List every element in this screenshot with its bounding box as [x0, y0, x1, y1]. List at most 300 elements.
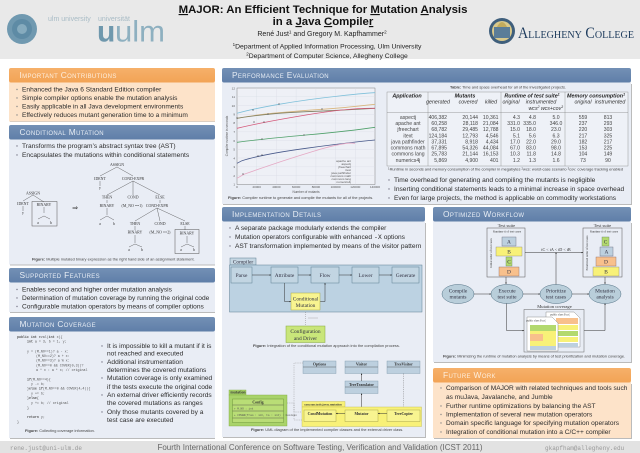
logo: ulm university: universität	[98, 16, 130, 23]
panel: optimized workflow	[433, 207, 632, 363]
figure: AST transformation: BINARY	[100, 204, 115, 208]
bullet list: conditional mutation	[16, 143, 190, 159]
bullet list: conditional mutation: Encapsulates the mutations within conditional statements	[22, 152, 190, 159]
bullet list: coverage: test case are executed	[107, 417, 174, 424]
diagram: workflow: tC < tA < tD < tB	[541, 247, 571, 252]
bullet list: coverage	[101, 343, 213, 424]
table rows	[390, 115, 612, 164]
diagram: compiler pipeline: Conditional	[293, 296, 319, 302]
table: time and space overhead: wcs	[528, 106, 538, 112]
table rows: 1.3	[529, 158, 536, 164]
chart: compiler runtime: java pathfinder	[330, 171, 351, 175]
logo: ulm university: u	[97, 16, 115, 48]
table: time and space overhead: Application	[391, 94, 422, 100]
chart: compiler runtime: itext	[345, 168, 351, 172]
figure: AST transformation: THEN	[102, 196, 112, 200]
table rows: 217	[579, 134, 587, 140]
bullet list: coverage: It is impossible to kill a mutant if it is	[107, 343, 212, 350]
figure: AST transformation: a	[180, 248, 182, 252]
table rows: 12,788	[483, 127, 499, 133]
code listing: y = (M_NO==1)? a - x:	[27, 350, 69, 354]
diagram: workflow: mutants	[449, 294, 467, 300]
chart: compiler runtime: 10	[232, 104, 235, 108]
table: time and space overhead: wcs+cov	[541, 106, 561, 112]
table rows: 346.0	[550, 121, 563, 127]
diagram: workflow: Initial order of test cases	[489, 237, 493, 268]
table: time and space overhead: instrumented	[595, 100, 626, 106]
table rows: 1.2	[513, 158, 520, 164]
figure caption: coverage: Figure: Collecting coverage information.	[25, 428, 95, 433]
table rows: 23.0	[551, 127, 561, 133]
table rows: 73	[580, 158, 586, 164]
table rows: 37,331	[431, 140, 447, 146]
code listing: }	[17, 420, 19, 424]
figure: AST transformation: y	[22, 211, 24, 215]
diagram: UML classes: CondMutation	[308, 412, 333, 416]
diagram: workflow: B	[507, 250, 511, 256]
table rows: 104	[579, 152, 587, 158]
bullet list: coverage: the covered mutations as ranges	[107, 400, 203, 407]
table rows: apache ant	[395, 121, 421, 127]
figure: AST transformation: IDENT	[94, 177, 106, 181]
footer: left email: rene.just@uni-ulm.de	[10, 445, 82, 452]
bullet list: contributions	[16, 86, 188, 119]
diagram: compiler pipeline	[230, 258, 422, 342]
table rows: 25,783	[431, 152, 447, 158]
diagram: UML classes: + COVER(from : int, to : int) : boolean	[234, 413, 297, 417]
chart: compiler runtime: 8	[233, 121, 235, 125]
table rows: 5.0	[552, 115, 560, 121]
table rows: 1.6	[552, 158, 560, 164]
table rows: 4,546	[486, 134, 499, 140]
table rows: 401	[490, 158, 499, 164]
panel: supported features	[9, 268, 215, 313]
diagram: workflow: Runtime ti of test cases	[590, 230, 619, 234]
table rows: 5,869	[434, 158, 447, 164]
table rows: 4,434	[486, 140, 499, 146]
code listing: y += b; // original	[31, 401, 69, 405]
bullet list: coverage: not reached and executed	[107, 350, 184, 358]
code listing: return y;	[27, 415, 45, 419]
diagram: UML classes: + M_NO : int	[234, 406, 254, 410]
bullet list: implementation	[229, 225, 422, 250]
bullet list: supported features: Enables second and higher order mutation analysis	[22, 286, 173, 294]
figure: AST transformation: ⇒	[72, 205, 78, 212]
code listing: }else{	[27, 396, 39, 400]
chart: compiler runtime: 7	[233, 130, 235, 134]
diagram: compiler pipeline: Attribute	[275, 273, 295, 279]
figure: AST transformation: a	[128, 248, 130, 252]
table rows: 60,258	[431, 121, 447, 127]
affiliations: 1	[233, 42, 236, 47]
bullet list: coverage: Only those mutants covered by a	[107, 409, 204, 416]
diagram: workflow: B	[604, 270, 608, 276]
heading: optimized workflow: Optimized Workflow	[443, 209, 524, 219]
table rows: 20,144	[462, 115, 478, 121]
figure: AST transformation: b	[141, 248, 143, 252]
table rows: 331.0	[507, 121, 520, 127]
chart: compiler runtime: 20000	[253, 185, 261, 189]
table rows: 10.3	[510, 152, 520, 158]
table rows: 4.3	[513, 115, 520, 121]
table rows: 98.0	[551, 146, 561, 152]
authors: and Gregory M. Kapfhammer	[291, 31, 385, 38]
bullet list: future work: Implementation of several new mutation operators	[446, 412, 593, 418]
footer: right email: gkapfham@allegheny.edu	[545, 445, 625, 452]
authors: 2	[384, 30, 387, 35]
table: time and space overhead: Mutants	[455, 94, 475, 100]
figure: AST transformation: COND	[127, 196, 139, 200]
chart: compiler runtime: commons math	[330, 174, 351, 178]
table: time and space overhead: 3	[561, 105, 563, 109]
chart: compiler runtime: 140000	[370, 185, 380, 189]
bullet list: coverage: if the tests execute the original code	[107, 384, 213, 391]
panel: conditional mutation	[9, 125, 215, 266]
chart: compiler runtime: 2	[233, 174, 235, 178]
bullet list: future work: Integration of conditional mutation into a C/C++ compiler	[446, 429, 611, 436]
logo: allegheny college	[489, 18, 634, 44]
table rows: 406,382	[429, 115, 447, 121]
affiliations: 2	[246, 52, 249, 57]
code listing: public int eval(int x){	[17, 335, 63, 339]
figure: AST transformation: (M_NO ==1)	[122, 204, 143, 208]
authors: René Just	[257, 31, 289, 38]
figure caption: UML: Figure: UML diagram of the implemented compiler classes and the external driver class.	[251, 427, 403, 432]
table rows: 83.0	[526, 146, 536, 152]
figure: AST transformation: BINARY	[128, 230, 143, 234]
chart: compiler runtime: apache ant	[336, 159, 351, 163]
table rows: 813	[604, 115, 612, 121]
table: time and space overhead: 3	[568, 166, 570, 170]
table rows: 15.0	[510, 127, 520, 133]
diagram: workflow: Compile	[449, 288, 468, 294]
table rows: 28,118	[463, 121, 478, 127]
table rows: 17.0	[510, 140, 520, 146]
bullet list: implementation: Mutation operators configurable with enhanced -X options	[235, 234, 406, 241]
bullet list: coverage: An external driver efficiently records	[107, 392, 212, 399]
table: time and space overhead: original	[574, 100, 592, 106]
table rows: jfreechart	[396, 127, 419, 133]
code listing: }else if(M_NO==0 && COVER(4,4)){	[27, 386, 90, 390]
table: time and space overhead: Runtime of test suite	[504, 94, 558, 100]
table: time and space overhead: instrumented	[526, 100, 557, 106]
diagram: compiler pipeline: Generate	[396, 273, 416, 279]
table: time and space overhead: Table: Time and space overhead for all of the investigated projects.	[450, 84, 566, 90]
table rows: 14.8	[551, 152, 561, 158]
table: time and space overhead: covered	[459, 100, 478, 106]
diagram: compiler pipeline: and Driver	[294, 336, 317, 342]
table rows: 18.0	[526, 127, 536, 133]
chart: compiler runtime: 12	[232, 86, 235, 90]
code listing	[17, 335, 90, 424]
table rows: 11.8	[526, 152, 536, 158]
chart: compiler runtime: 1	[233, 182, 235, 186]
footer: conference: Fourth International Conference on Software Testing, Verification and Validation (ICST 2011)	[158, 443, 483, 452]
figure: AST transformation: BINARY	[37, 203, 52, 207]
diagram: UML classes: Options	[313, 362, 327, 366]
code listing: y += b;	[31, 392, 45, 396]
diagram: workflow: Execute	[498, 288, 516, 294]
table: time and space overhead	[387, 84, 628, 172]
table: time and space overhead: 2	[537, 105, 540, 109]
chart: compiler runtime	[225, 86, 380, 194]
heading: mutation coverage: Mutation Coverage	[20, 319, 96, 329]
bullet list: coverage: determines the covered mutations	[107, 367, 207, 374]
chart: compiler runtime: commons lang	[331, 177, 351, 181]
table rows: commons math	[391, 146, 426, 152]
table rows: 21,084	[483, 121, 499, 127]
bullet list: contributions: Simple compiler options enable the mutation analysis	[22, 95, 178, 102]
diagram: workflow: Mutation	[595, 288, 615, 294]
figure: AST transformation: ASSIGN	[26, 192, 40, 196]
diagram: UML classes: Config	[252, 400, 264, 404]
diagram: workflow: test cases	[546, 294, 566, 300]
table rows: 220	[579, 127, 587, 133]
bullet list: performance: Time overhead for generating and compiling the mutants is negligible	[394, 177, 596, 184]
table rows: 153	[579, 146, 587, 152]
diagram: UML classes: TreeVisitor	[394, 362, 413, 366]
figure caption: chart: Figure: Compiler runtime to generate and compile the mutants for all of the projects.	[228, 195, 373, 200]
table rows: 44,084	[483, 146, 499, 152]
bullet list: supported features: Determination of mutation coverage by running the original code	[22, 295, 210, 302]
diagram: workflow: Prioritized order of test cases	[585, 235, 589, 270]
figure: AST transformation	[17, 163, 199, 254]
bullet list: implementation: AST transformation implemented by means of the visitor pattern	[235, 243, 422, 250]
table rows: 5.1	[513, 134, 520, 140]
header band	[0, 0, 640, 59]
diagram: workflow: A	[507, 240, 511, 246]
diagram: workflow: C	[507, 260, 511, 266]
table rows: java pathfinder	[390, 140, 425, 146]
panel: future work	[433, 368, 632, 439]
footer	[0, 441, 640, 453]
figure: AST transformation: ELSE	[155, 196, 165, 200]
code listing: (M_NO==2)? a + x:	[36, 354, 70, 358]
diagram: UML classes: TreeTranslator	[349, 383, 374, 387]
table rows: 237	[579, 121, 587, 127]
table rows: 67,895	[431, 146, 447, 152]
affiliations: Department of Applied Information Processing, Ulm University	[235, 44, 422, 50]
diagram: compiler pipeline: Configuration	[290, 328, 321, 335]
bullet list: performance	[388, 177, 625, 202]
heading: future work: Future Work	[443, 370, 496, 380]
bullet list: contributions: Easily applicable in all Java development environments	[22, 104, 184, 110]
table: time and space overhead: original	[502, 100, 520, 106]
panel: performance evaluation	[222, 68, 632, 205]
chart: compiler runtime: 11	[232, 95, 235, 99]
diagram: workflow: public class Foo{	[526, 320, 546, 322]
logo: ulm university: ulm university	[48, 16, 91, 23]
code listing: int a = 3, b = 1, y;	[27, 340, 67, 344]
affiliations: Department of Computer Science, Allegheny College	[249, 53, 408, 60]
table rows: 5.6	[529, 134, 536, 140]
title: MAJOR: An Efficient Technique for Mutation Analysis	[179, 4, 467, 16]
panel: important contributions	[9, 68, 215, 122]
diagram: workflow: D	[604, 260, 608, 266]
figure caption: workflow: Figure: Minimizing the runtime of mutation analysis by means of test prioritization and mutation coverage.	[443, 354, 625, 358]
figure: AST transformation: b	[193, 248, 195, 252]
chart: compiler runtime: 5	[233, 148, 235, 152]
bullet list: coverage: Mutation coverage is only examined	[107, 375, 213, 382]
title: in a Java Compiler	[273, 16, 374, 28]
diagram: UML classes	[229, 361, 422, 426]
heading: important contributions: Important Contributions	[20, 70, 117, 80]
diagram: workflow: D	[507, 270, 511, 276]
figure: AST transformation: y	[99, 186, 101, 190]
chart: compiler runtime: 40000	[272, 185, 281, 189]
affiliations	[233, 42, 422, 60]
figure: AST transformation: IDENT	[17, 202, 29, 206]
heading: conditional mutation: Conditional Mutation	[20, 127, 104, 137]
table rows: 225	[604, 146, 612, 152]
bullet list: future work: Comparison of MAJOR with related techniques and tools such	[446, 385, 628, 392]
figure: AST transformation: ELSE	[180, 222, 190, 226]
heading: supported features: Supported Features	[20, 270, 100, 280]
diagram: UML classes: Visitor	[356, 362, 367, 366]
table rows: 8,918	[465, 140, 478, 146]
code listing: (M_NO==0 && COVER(0,3))?	[36, 364, 84, 368]
table rows: 303	[604, 127, 612, 133]
table: time and space overhead: 1	[558, 93, 560, 97]
figure: AST transformation: THEN	[130, 222, 140, 226]
table: time and space overhead: 2	[521, 166, 523, 170]
table: time and space overhead: killed	[485, 100, 498, 106]
chart: compiler runtime: jfreechart	[337, 165, 351, 169]
figure: AST transformation: b	[50, 221, 52, 225]
table rows: 559	[579, 115, 587, 121]
diagram: workflow: public class Foo{	[550, 314, 570, 316]
bullet list: future work: Further runtime optimizations by balancing the AST	[446, 403, 596, 410]
chart: compiler runtime: 0	[236, 185, 238, 189]
diagram: workflow: C	[604, 240, 608, 246]
table: time and space overhead: Runtime in seconds and memory consumption of the compiler in megabytes	[390, 166, 521, 172]
table rows: 149	[604, 152, 612, 158]
authors: 1	[289, 30, 292, 35]
table rows: 124,184	[429, 134, 447, 140]
diagram: workflow: test suite	[497, 294, 517, 300]
figure: AST transformation: a	[37, 221, 39, 225]
diagram: UML classes: com.sun.tools.javac.mutation	[304, 402, 342, 406]
diagram: UML classes: Mutator	[354, 412, 369, 416]
bullet list: supported features	[16, 286, 210, 310]
bullet list: contributions: Effectively reduces mutant generation time to a minimum	[22, 112, 188, 119]
chart: compiler runtime: numerics4j	[336, 180, 351, 184]
title	[179, 4, 467, 28]
chart: compiler runtime: 3	[233, 165, 235, 169]
code listing: if(M_NO==4){	[27, 378, 51, 382]
code listing: (M_NO==3)? a % x:	[36, 358, 70, 362]
heading: implementation details: Implementation Details	[232, 209, 321, 219]
diagram: compiler pipeline: Lower	[358, 273, 373, 279]
diagram: workflow: Test suite	[594, 223, 611, 228]
bullet list: future work	[440, 385, 628, 436]
bullet list: contributions: Enhanced the Java 6 Standard Edition compiler	[22, 86, 162, 94]
table: time and space overhead: wcs: worst-case scenario	[523, 166, 568, 172]
table rows: 67.0	[510, 146, 520, 152]
diagram: compiler pipeline: Mutation	[296, 303, 316, 309]
chart: compiler runtime: 120000	[350, 185, 361, 189]
table rows: 90	[605, 158, 611, 164]
table rows: 21,144	[462, 152, 478, 158]
table rows: 4,900	[465, 158, 478, 164]
table: time and space overhead: 1	[623, 93, 625, 97]
chart: compiler runtime: 80000	[312, 185, 320, 189]
chart: compiler runtime: 100000	[331, 185, 341, 189]
figure: AST transformation: (M_NO ==2)	[150, 230, 171, 234]
code listing: }	[27, 406, 29, 410]
table rows: aspectj	[400, 115, 416, 121]
diagram: compiler pipeline: Compiler	[233, 260, 253, 266]
figure: AST transformation: BINARY	[180, 232, 195, 236]
figure: AST transformation: a	[99, 222, 101, 226]
diagram: UML classes: TreeCopier	[394, 412, 413, 416]
figure caption: AST: Figure: Multiple mutated binary expression as the right hand side of an assignment statement.	[32, 256, 195, 262]
table rows: itext	[403, 134, 413, 140]
heading: performance evaluation: Performance Evaluation	[232, 70, 329, 80]
diagram: workflow: Test suite	[498, 223, 515, 228]
figure: AST transformation: b	[113, 222, 115, 226]
figure: AST transformation: COND-EXPR	[146, 204, 169, 208]
table rows: 325	[604, 134, 612, 140]
bullet list: performance: Even for large projects, the method is applicable on commodity workstations	[394, 195, 617, 202]
table rows: 10,361	[483, 115, 499, 121]
panel: implementation details	[222, 207, 426, 438]
table rows: 182	[579, 140, 587, 146]
diagram: workflow	[442, 223, 622, 352]
diagram: workflow: Prioritize	[546, 288, 567, 294]
diagram: workflow: Runtime ti of test cases	[493, 230, 522, 234]
table rows: 12,793	[462, 134, 478, 140]
table rows: 293	[604, 121, 612, 127]
bullet list: future work: as muJava, Javalanche, and Jumble	[446, 394, 553, 401]
table rows: commons lang	[391, 152, 425, 158]
table rows: 54,326	[462, 146, 478, 152]
figure: AST transformation: COND-EXPR	[122, 177, 145, 181]
table: time and space overhead: cov: coverage tracking enabled	[569, 166, 623, 172]
figure caption: compiler: Figure: Integration of the conditional mutation approach into the compilation process.	[253, 343, 400, 348]
diagram: UML classes: mutation	[230, 390, 246, 394]
bullet list: supported features: Configurable mutation operators by means of compiler options	[22, 304, 204, 310]
table: time and space overhead: 1	[388, 166, 390, 170]
code listing: y -= b;	[31, 382, 45, 386]
table rows: 4.8	[529, 115, 536, 121]
bullet list: implementation: A separate package modularly extends the compiler	[235, 225, 387, 232]
diagram: compiler pipeline: Flow	[319, 273, 331, 279]
table rows: 22.0	[526, 140, 536, 146]
chart: compiler runtime: 4	[233, 156, 235, 160]
table: time and space overhead: generated	[426, 100, 451, 106]
diagram: workflow: analysis	[596, 294, 614, 300]
diagram: workflow: Mutation coverage	[537, 304, 572, 309]
diagram: compiler pipeline: Parse	[236, 273, 248, 279]
chart: compiler runtime: 9	[233, 112, 235, 116]
logo: ulm university	[7, 14, 165, 48]
panel: mutation coverage	[9, 317, 215, 439]
figure: AST transformation: ASSIGN	[110, 163, 124, 167]
table rows: 6.3	[552, 134, 560, 140]
chart: compiler runtime: Compiler runtime in seconds	[225, 115, 229, 156]
table rows: 335.0	[523, 121, 536, 127]
diagram: workflow: A	[605, 250, 609, 256]
table rows: 29.0	[551, 140, 561, 146]
code listing: a * x : a * x; // original	[36, 368, 87, 372]
table rows: 16,153	[483, 152, 499, 158]
table rows: numerics4j	[396, 158, 420, 164]
bullet list: coverage: Additional instrumentation	[107, 359, 183, 366]
chart: compiler runtime: 6	[233, 139, 235, 143]
table rows: 217	[604, 140, 612, 146]
logo: ulm university: ulm	[115, 16, 165, 48]
